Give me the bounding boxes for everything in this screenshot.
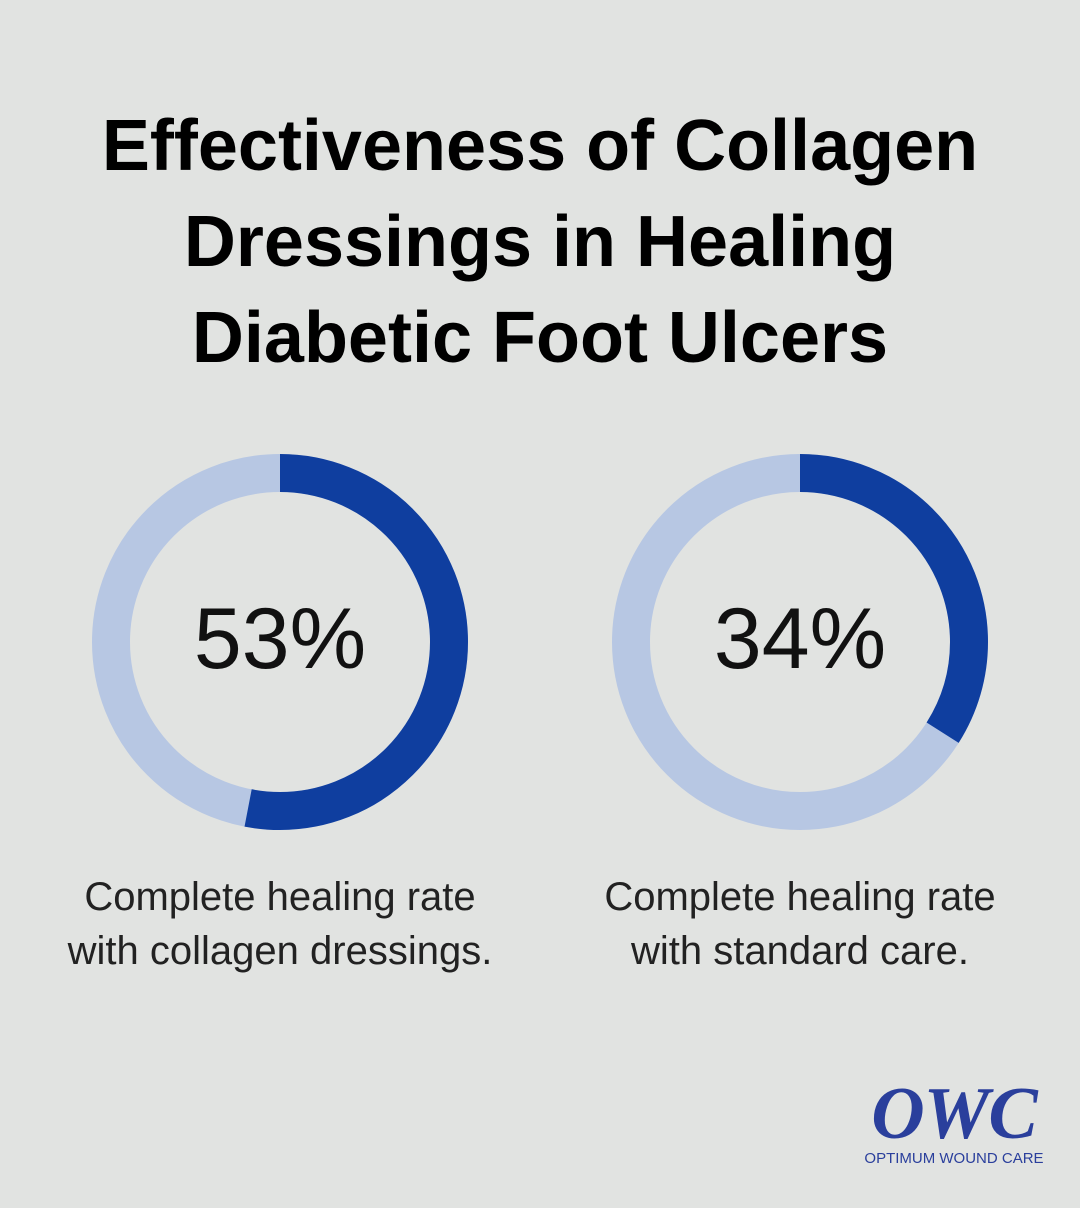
caption right: Complete healing rate [604,875,996,919]
value 53%: 53% [194,591,366,687]
caption left: Complete healing rate [84,875,476,919]
caption left [68,875,492,973]
title [102,106,978,378]
value 34%: 34% [714,591,886,687]
donut: 53% [111,473,449,811]
caption left: with collagen dressings. [68,929,492,973]
logo: OPTIMUM WOUND CARE [864,1150,1044,1167]
title: Effectiveness of Collagen [102,106,978,186]
caption right: with standard care. [631,929,969,973]
donut: 34% [631,473,969,811]
caption right [604,875,996,973]
title: Dressings in Healing [184,202,896,282]
title: Diabetic Foot Ulcers [192,298,888,378]
logo: OWC [871,1073,1037,1155]
